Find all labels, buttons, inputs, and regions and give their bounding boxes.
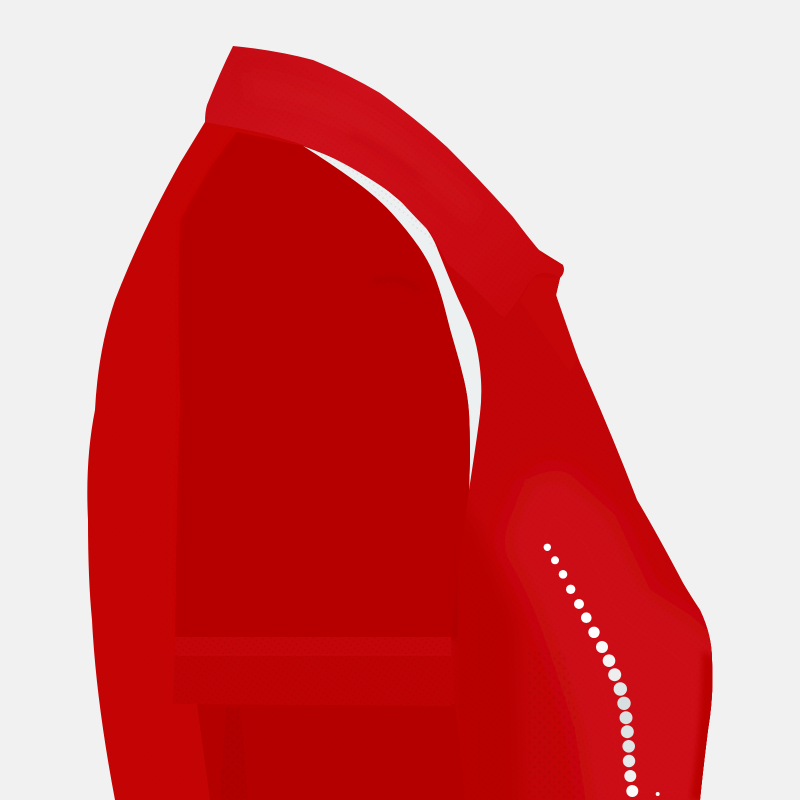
illustration: red polo shirt side view xyxy=(87,46,712,800)
sleeve crease xyxy=(372,278,420,290)
bright side panel xyxy=(505,471,712,800)
reflective dot trail xyxy=(544,544,660,797)
placket xyxy=(520,277,578,372)
collar highlight xyxy=(245,72,480,225)
sleeve hem xyxy=(173,637,451,706)
collar fold shade xyxy=(350,135,420,180)
shirt body xyxy=(87,122,712,800)
sleeve seam highlight xyxy=(173,130,234,640)
front panel xyxy=(555,260,712,800)
lower mesh panel xyxy=(528,650,585,800)
collar mesh texture xyxy=(205,46,545,317)
front seam shade xyxy=(454,525,514,800)
sleeve xyxy=(173,130,470,640)
right edge shade xyxy=(690,652,712,800)
white shoulder stripe xyxy=(303,146,481,490)
lower body under hem xyxy=(197,704,465,800)
sleeve mesh texture xyxy=(175,132,470,640)
collar xyxy=(205,46,564,317)
